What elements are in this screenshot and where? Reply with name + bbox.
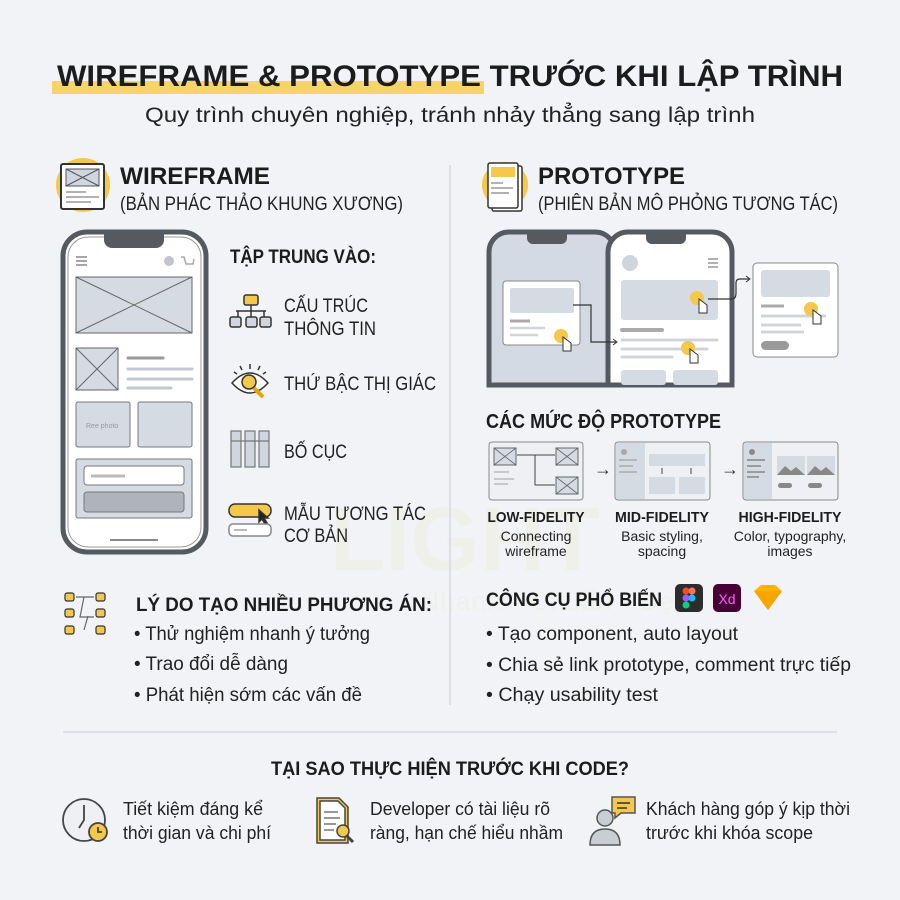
wireframe phone mockup: Ree photo bbox=[86, 423, 118, 430]
icon: interaction bbox=[229, 504, 271, 536]
icon: document search bbox=[317, 798, 353, 843]
mid fidelity bbox=[615, 442, 710, 500]
prototype levels: → bbox=[594, 459, 612, 479]
icon: figma bbox=[675, 584, 703, 612]
panel: prototype bbox=[482, 162, 851, 706]
icon: eye bbox=[232, 364, 268, 397]
prototype levels: MID-FIDELITY bbox=[615, 509, 709, 526]
popular tools bbox=[486, 584, 851, 706]
prototype levels: Connecting bbox=[501, 528, 571, 544]
panel: why before code: Developer có tài liệu rõ bbox=[370, 799, 550, 819]
subtitle: Quy trình chuyên nghiệp, tránh nhảy thẳng sang lập trình bbox=[145, 103, 755, 127]
reasons for multiple options: • Thử nghiệm nhanh ý tưởng bbox=[134, 624, 370, 645]
heading: wireframe bbox=[120, 163, 403, 215]
heading: wireframe: (BẢN PHÁC THẢO KHUNG XƯƠNG) bbox=[120, 193, 403, 215]
prototype levels bbox=[486, 409, 846, 559]
icon: clock bbox=[63, 799, 107, 841]
prototype levels: → bbox=[721, 459, 739, 479]
prototype levels: CÁC MỨC ĐỘ PROTOTYPE bbox=[486, 409, 721, 433]
watermark: LIGHT bbox=[330, 490, 600, 590]
heading: prototype bbox=[538, 163, 838, 215]
panel: why before code: Khách hàng góp ý kịp thời bbox=[646, 799, 850, 819]
popular tools: • Chia sẻ link prototype, comment trực tiếp bbox=[486, 655, 851, 676]
panel: wireframe bbox=[56, 158, 436, 706]
focus list: MẪU TƯƠNG TÁC bbox=[284, 503, 426, 525]
heading: wireframe: WIREFRAME bbox=[120, 163, 270, 190]
reasons for multiple options: LÝ DO TẠO NHIỀU PHƯƠNG ÁN: bbox=[136, 594, 432, 616]
low fidelity bbox=[489, 442, 583, 500]
popular tools: CÔNG CỤ PHỔ BIẾN bbox=[486, 589, 662, 611]
reasons for multiple options: • Trao đổi dễ dàng bbox=[134, 653, 288, 675]
heading: prototype: PROTOTYPE bbox=[538, 163, 685, 190]
focus list: CẤU TRÚC bbox=[284, 295, 368, 317]
panel: why before code: thời gian và chi phí bbox=[123, 823, 271, 843]
prototype levels: wireframe bbox=[504, 543, 567, 559]
reasons for multiple options bbox=[65, 593, 432, 706]
watermark bbox=[330, 490, 690, 616]
prototype levels: Color, typography, bbox=[734, 528, 846, 544]
icon: client feedback bbox=[590, 797, 635, 845]
prototype levels: HIGH-FIDELITY bbox=[738, 509, 842, 526]
icon: layout columns bbox=[231, 431, 269, 467]
icon: options flow bbox=[65, 593, 105, 634]
focus list bbox=[229, 246, 436, 547]
panel: why before code: TẠI SAO THỰC HIỆN TRƯỚC KHI CODE? bbox=[271, 758, 629, 780]
reasons for multiple options: • Phát hiện sớm các vấn đề bbox=[134, 685, 362, 706]
popular tools: • Chạy usability test bbox=[486, 685, 659, 706]
icon: xd bbox=[713, 584, 741, 612]
focus list: THỨ BẬC THỊ GIÁC bbox=[284, 373, 436, 395]
wireframe phone mockup bbox=[63, 232, 206, 552]
icon: wireframe doc bbox=[56, 158, 110, 212]
icon: sketch bbox=[754, 585, 782, 610]
icon: prototype bbox=[482, 162, 528, 211]
panel: why before code: trước khi khóa scope bbox=[646, 823, 813, 843]
focus list: BỐ CỤC bbox=[284, 441, 347, 463]
popular tools: • Tạo component, auto layout bbox=[486, 624, 739, 645]
panel: why before code: Tiết kiệm đáng kể bbox=[123, 799, 263, 819]
panel: why before code: ràng, hạn chế hiểu nhầm bbox=[370, 823, 563, 843]
focus list: TẬP TRUNG VÀO: bbox=[230, 246, 376, 268]
prototype levels: spacing bbox=[638, 543, 686, 559]
focus list: CƠ BẢN bbox=[284, 525, 348, 547]
prototype levels: Basic styling, bbox=[621, 528, 703, 544]
prototype levels: LOW-FIDELITY bbox=[488, 509, 584, 526]
prototype phones with interaction flow bbox=[489, 232, 838, 385]
watermark: Nhanh - Chuẩn - Đẹp bbox=[420, 586, 690, 616]
panel: why before code bbox=[63, 758, 850, 845]
icon: xd: Xd bbox=[718, 591, 736, 607]
prototype levels: images bbox=[767, 543, 813, 559]
high fidelity bbox=[743, 442, 838, 500]
heading: prototype: (PHIÊN BẢN MÔ PHỎNG TƯƠNG TÁC) bbox=[538, 193, 838, 215]
icon: hierarchy bbox=[230, 295, 271, 327]
title: WIREFRAME & PROTOTYPE TRƯỚC KHI LẬP TRÌNH bbox=[57, 59, 843, 93]
focus list: THÔNG TIN bbox=[284, 318, 376, 340]
